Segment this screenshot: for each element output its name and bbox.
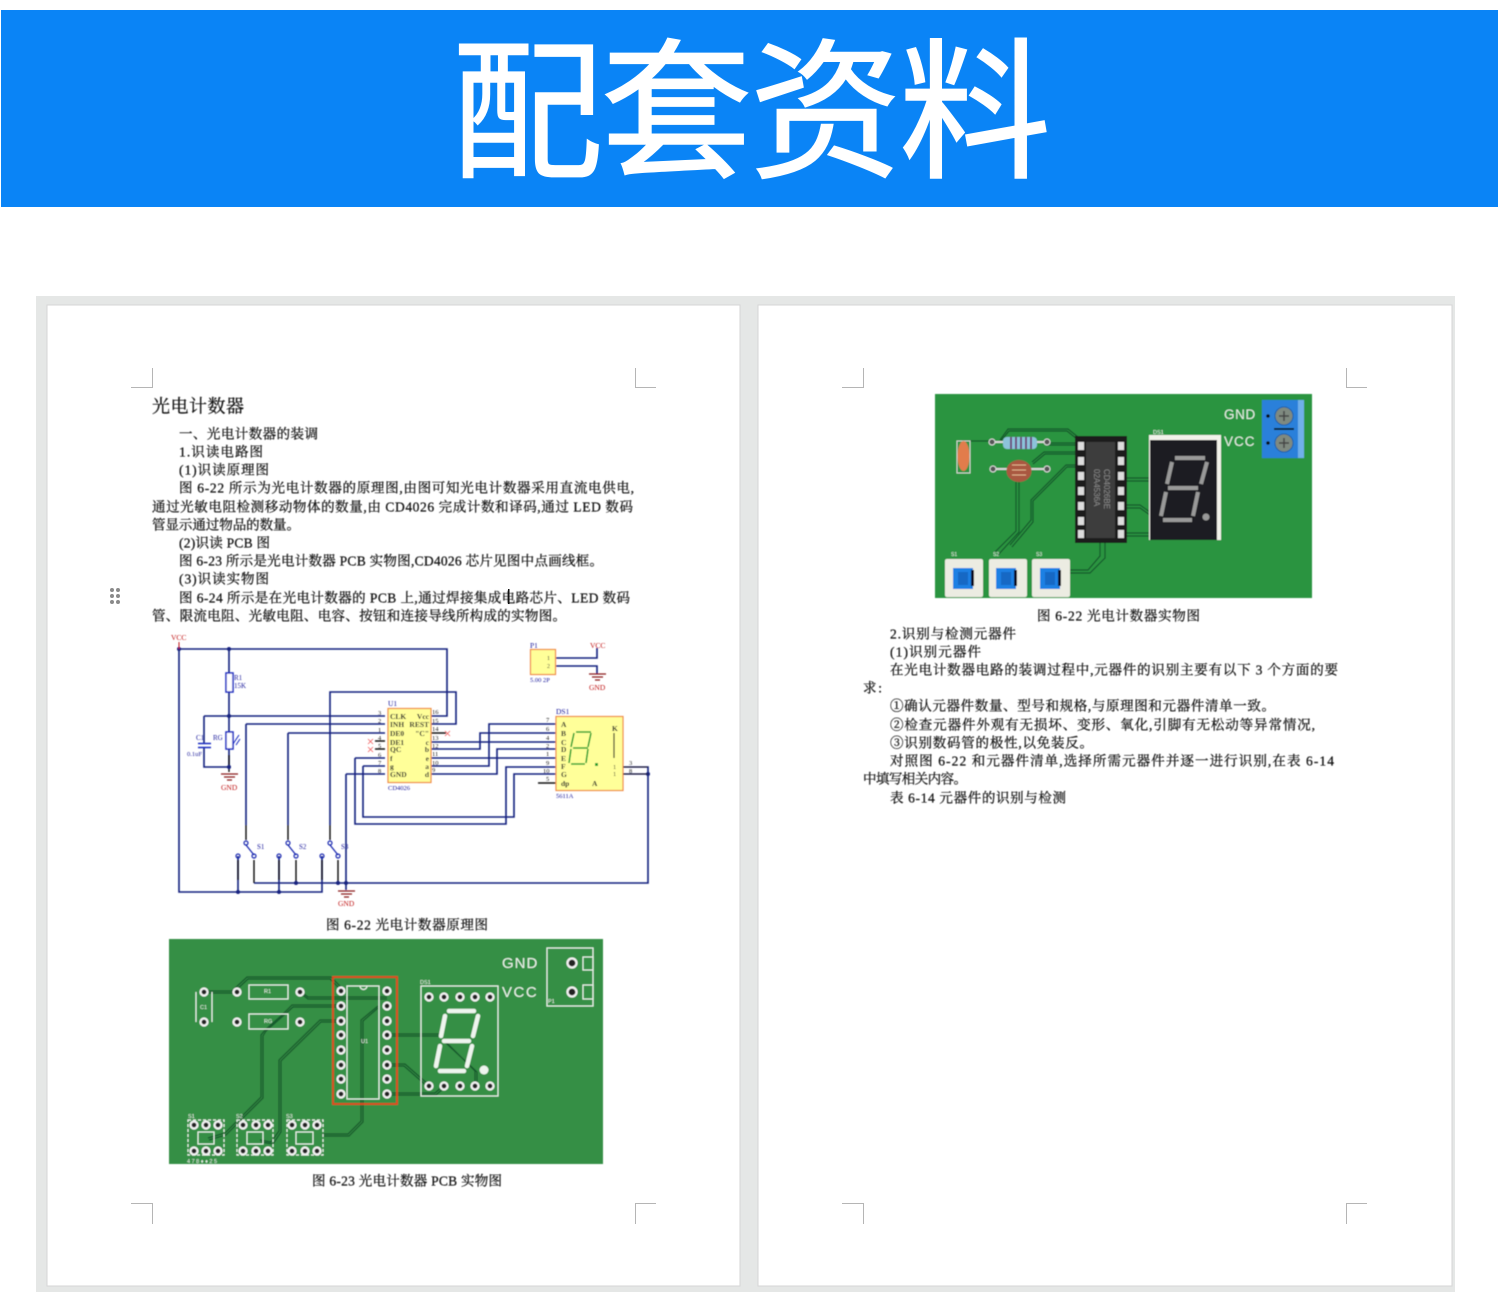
LED display DS1: dp — [561, 779, 569, 788]
switch S2: S2 — [299, 843, 307, 851]
switch S1 — [236, 841, 265, 858]
document text: right page: 在光电计数器电路的装调过程中,元器件的识别主要有以下 3 个方面的要 — [890, 662, 1338, 678]
IC chip CD4026: 02A4536A — [1092, 469, 1101, 507]
chip U1 CD4026: DE1 — [390, 738, 404, 747]
chip U1 CD4026: 15 — [432, 718, 438, 725]
LED display DS1: F — [561, 762, 566, 771]
connector P1 — [530, 641, 556, 684]
chip U1 CD4026: 5 — [378, 743, 381, 750]
PCB labels: S1 — [188, 1114, 195, 1120]
seven segment display — [1149, 430, 1221, 540]
PCB labels: 4 7 8 ♦ ♦ 2 5 — [187, 1159, 217, 1165]
board traces — [962, 429, 1150, 573]
LED display DS1: A — [561, 720, 567, 729]
board labels: GND — [1224, 407, 1256, 422]
chip U1 CD4026: 9 — [432, 767, 435, 774]
PCB labels: S3 — [286, 1114, 293, 1120]
chip U1 CD4026: 12 — [432, 743, 438, 750]
page crop marks — [842, 368, 1367, 1224]
switch S2 — [277, 841, 307, 858]
LED display DS1: 8 — [629, 768, 632, 775]
PCB pads — [190, 958, 576, 1154]
push button S2 — [989, 559, 1027, 597]
chip U1 CD4026: a — [425, 762, 429, 771]
photoresistor RG: RG — [213, 734, 223, 742]
PCB traces — [204, 977, 477, 1144]
chip U1 CD4026: CD4026 — [388, 785, 411, 792]
chip U1 CD4026: 11 — [432, 751, 438, 758]
switch S3: S3 — [341, 843, 349, 851]
IC chip CD4026 — [1075, 436, 1127, 543]
LED display DS1: 4 — [546, 735, 550, 742]
LED display DS1: 10 — [543, 768, 550, 775]
LED display DS1: 1 — [613, 764, 616, 771]
chip U1 CD4026: 4 — [378, 735, 382, 742]
power labels: VCC — [590, 641, 605, 650]
PCB labels: P1 — [548, 999, 555, 1005]
right document page — [758, 305, 1452, 1286]
PCB labels: VCC — [502, 984, 538, 1001]
junction dots — [177, 647, 650, 894]
resistor R1: 15K — [234, 682, 246, 690]
document text: right page: 对照图 6-22 和元器件清单,选择所需元器件并逐一进行识别,在表 6-14 — [890, 753, 1334, 769]
chip U1 CD4026: 1 — [378, 727, 381, 734]
PCB labels: C1 — [200, 1005, 207, 1011]
chip U1 CD4026: 8 — [378, 768, 381, 775]
switch S1: S1 — [257, 843, 265, 851]
chip U1 CD4026: 3 — [378, 710, 381, 717]
chip U1 CD4026: 7 — [378, 760, 382, 767]
push button S1 — [945, 559, 983, 597]
switch S3 — [320, 841, 349, 858]
chip U1 CD4026: 6 — [378, 752, 382, 759]
chip U1 CD4026: INH — [390, 720, 404, 729]
PCB labels: S2 — [236, 1114, 243, 1120]
document text: left page: 一、光电计数器的装调 — [179, 426, 318, 442]
LED display DS1: 2 — [546, 743, 549, 750]
document viewer background — [36, 296, 1455, 1292]
LED display DS1: DS1 — [556, 707, 570, 716]
LED display DS1: C — [561, 738, 566, 747]
seven-segment silkscreen — [436, 1011, 488, 1074]
chip U1 CD4026: GND — [390, 770, 407, 779]
resistor component — [989, 437, 1050, 449]
push button S3 — [1032, 559, 1070, 597]
chip U1 CD4026 — [368, 699, 450, 792]
PCB labels — [187, 955, 555, 1165]
board labels: S1 — [951, 552, 957, 558]
seven segment display: DS1 — [1153, 430, 1164, 436]
power labels: GND — [221, 783, 238, 792]
assembled board photo — [935, 394, 1312, 598]
capacitor C1 — [187, 734, 211, 758]
LED display DS1: D — [561, 745, 567, 754]
power labels — [171, 633, 606, 908]
connector P1: P1 — [530, 641, 538, 650]
photoresistor component — [990, 460, 1050, 482]
capacitor C1: C1 — [196, 734, 205, 742]
PCB photo — [169, 939, 603, 1165]
capacitor C1: 0.1uF — [187, 751, 202, 758]
document text: right page: ①确认元器件数量、型号和规格,与原理图和元器件清单一致。 — [890, 698, 1275, 714]
document text: left page: 图 6-24 所示是在光电计数器的 PCB 上,通过焊接集成电路芯片、LED 数码 — [179, 590, 630, 606]
document text: left page — [152, 397, 634, 624]
LED display DS1: 5 — [546, 776, 549, 783]
board labels: VCC — [1224, 434, 1256, 449]
chip U1 CD4026: U1 — [388, 699, 397, 708]
connector P1: 1 — [547, 656, 550, 662]
IC chip CD4026: CD4026BE — [1102, 469, 1111, 509]
document text: right page: 中填写相关内容。 — [863, 771, 967, 787]
document text: right page: 表 6-14 元器件的识别与检测 — [890, 790, 1066, 806]
chip U1 CD4026: 16 — [432, 709, 439, 716]
chip U1 CD4026: 13 — [432, 735, 438, 742]
PCB labels: RG — [264, 1019, 272, 1025]
connector P1: 2 — [547, 664, 550, 670]
PCB labels: R1 — [264, 989, 271, 995]
drag handle icon — [110, 588, 120, 604]
chip U1 CD4026: DE0 — [390, 729, 404, 738]
text cursor — [508, 589, 510, 604]
power labels: GND — [338, 899, 355, 908]
caption: figure 6-23 PCB: 图 6-23 光电计数器 PCB 实物图 — [312, 1173, 502, 1189]
LED display DS1: 1 — [546, 751, 549, 758]
chip U1 CD4026: QC — [390, 745, 401, 754]
photoresistor RG — [213, 732, 240, 749]
chip U1 CD4026: 14 — [432, 726, 439, 733]
document text: left page: 通过光敏电阻检测移动物体的数量,由 CD4026 完成计数和译码,通过 LED 数码 — [152, 499, 634, 515]
LED display DS1 — [543, 707, 648, 800]
LED display DS1: 1 — [613, 771, 616, 778]
LED display DS1: 6 — [546, 726, 550, 733]
page crop marks — [131, 368, 656, 1224]
LED display DS1: 3 — [629, 760, 632, 767]
terminal block — [1262, 400, 1304, 458]
LED display DS1: K — [612, 724, 618, 733]
silkscreen outlines — [188, 948, 593, 1155]
LED display DS1: B — [561, 729, 566, 738]
chip U1 CD4026: e — [426, 754, 430, 763]
schematic diagram — [171, 633, 650, 908]
board labels: S2 — [993, 552, 999, 558]
power labels: VCC — [171, 633, 186, 642]
chip U1 CD4026: 10 — [432, 760, 438, 767]
LED display DS1: G — [561, 770, 567, 779]
document text: right page: 求: — [863, 680, 882, 696]
connector P1: 5.00 2P — [530, 677, 550, 684]
chip U1 CD4026: g — [390, 762, 394, 771]
chip U1 CD4026: CLK — [390, 712, 406, 721]
document text: right page: ②检查元器件外观有无损坏、变形、氧化,引脚有无松动等异常情况, — [890, 717, 1315, 733]
resistor R1: R1 — [234, 674, 243, 682]
chip highlight frame — [333, 977, 397, 1104]
chip U1 CD4026: REST — [409, 720, 429, 729]
caption: figure 6-22 photo: 图 6-22 光电计数器实物图 — [1037, 608, 1200, 624]
PCB labels: GND — [502, 955, 538, 972]
LED display DS1: 9 — [546, 760, 549, 767]
chip U1 CD4026: f — [390, 754, 393, 763]
chip U1 CD4026: c — [426, 738, 430, 747]
document text: left page: (3)识读实物图 — [179, 571, 269, 587]
LED display DS1: 7 — [546, 717, 550, 724]
document text: right page: (1)识别元器件 — [890, 644, 982, 660]
chip U1 CD4026: "C" — [415, 729, 429, 738]
LED display DS1: 5611A — [556, 793, 574, 800]
document text: right page: 2.识别与检测元器件 — [890, 626, 1016, 642]
PCB labels: U1 — [361, 1039, 368, 1045]
LED display DS1: E — [561, 754, 566, 763]
document heading: 光电计数器 — [152, 397, 244, 417]
document text: right page: ③识别数码管的极性,以免装反。 — [890, 735, 1093, 751]
chip U1 CD4026: Vcc — [417, 712, 430, 721]
chip U1 CD4026: 2 — [378, 718, 381, 725]
document text: left page: (1)识读原理图 — [179, 462, 269, 478]
capacitor — [957, 441, 970, 473]
PCB labels: DS1 — [420, 980, 431, 986]
left document page — [47, 305, 740, 1286]
document text: left page: 1.识读电路图 — [179, 444, 263, 460]
document text: left page: 图 6-22 所示为光电计数器的原理图,由图可知光电计数器采用直流电供电, — [179, 480, 634, 496]
chip U1 CD4026: b — [425, 745, 429, 754]
power labels: GND — [589, 683, 606, 692]
document text: left page: 图 6-23 所示是光电计数器 PCB 实物图,CD4026 芯片见图中点画线框。 — [179, 553, 603, 569]
chip U1 CD4026: d — [425, 770, 430, 779]
board labels — [951, 407, 1256, 558]
LED display DS1: A — [592, 779, 598, 788]
caption: figure 6-22 schematic: 图 6-22 光电计数器原理图 — [326, 917, 488, 933]
document text: left page: 管、限流电阻、光敏电阻、电容、按钮和连接导线所构成的实物图。 — [152, 608, 566, 624]
header banner — [1, 0, 1498, 210]
document text: left page: 管显示通过物品的数量。 — [152, 517, 300, 533]
document text: left page: (2)识读 PCB 图 — [179, 535, 270, 551]
resistor R1 — [226, 673, 246, 692]
document text: right page — [863, 608, 1338, 806]
board labels: S3 — [1036, 552, 1042, 558]
